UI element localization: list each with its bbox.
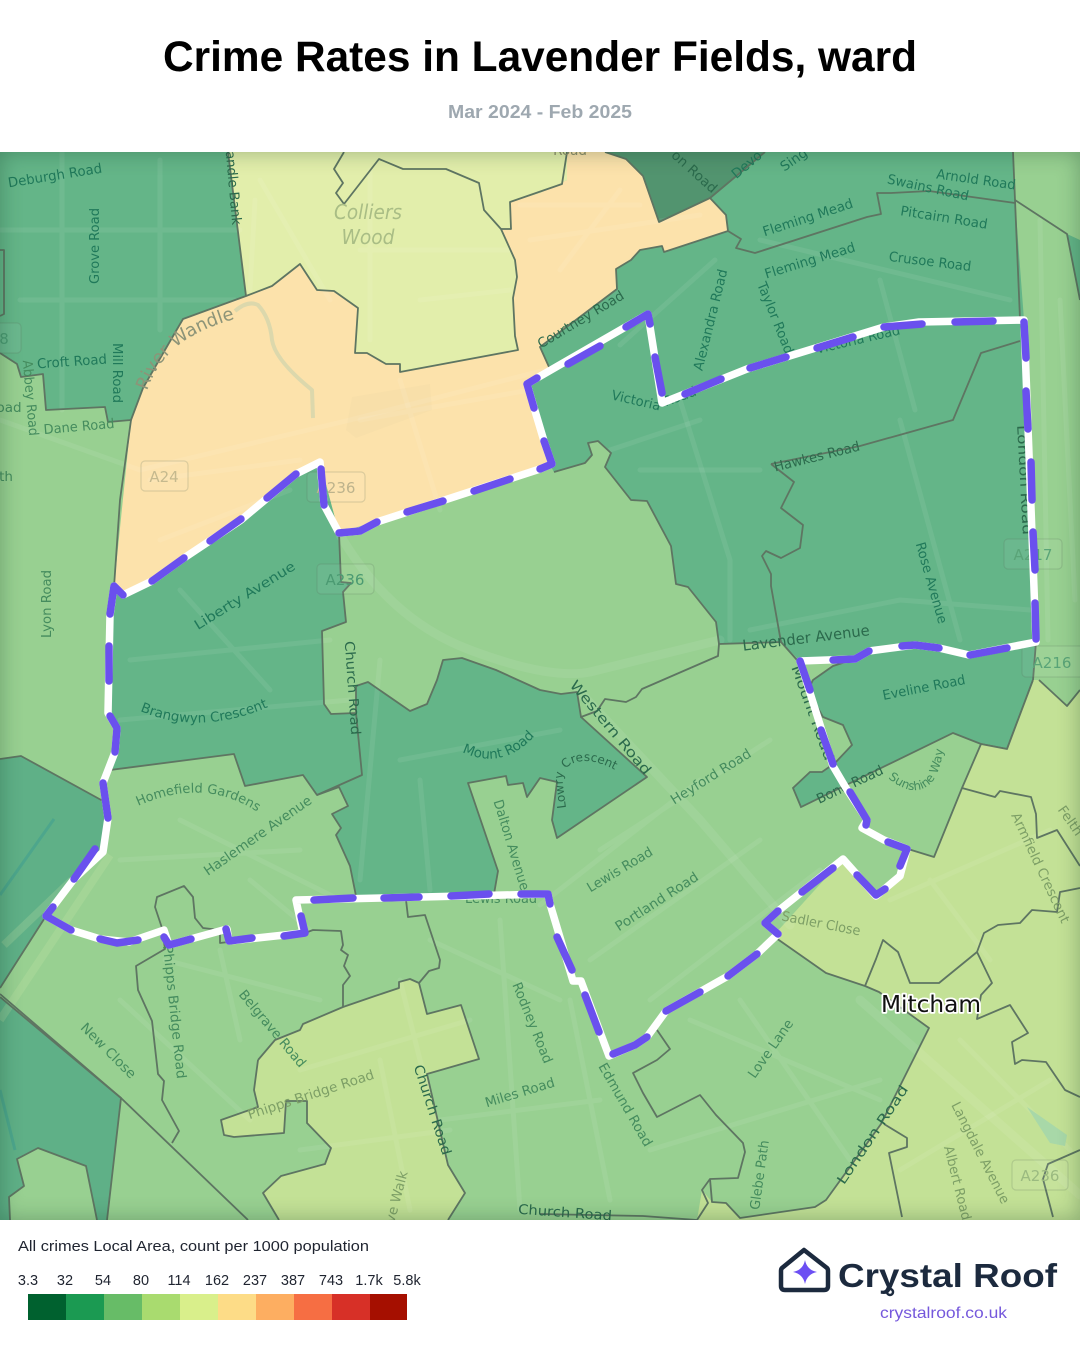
street name labels: Glebe Path	[747, 1139, 773, 1211]
street name labels: Hawkes Road	[772, 439, 862, 475]
street name labels: Road	[661, 384, 699, 410]
region: western dark green	[0, 756, 107, 988]
legend scale values	[18, 1273, 421, 1289]
region: south-western dark green	[0, 997, 121, 1220]
legend scale values: 237	[243, 1273, 267, 1289]
road number box: A24	[141, 461, 188, 491]
street name labels: andle Bank	[222, 150, 244, 226]
curved labels: river and crescents: Homefield Gardens	[136, 782, 260, 811]
region: Liberty Avenue dark green	[108, 462, 362, 795]
street name labels: Albert Road	[940, 1144, 974, 1222]
street name labels: Mill Road	[109, 343, 125, 403]
street name labels: Haslemere Avenue	[201, 793, 315, 879]
legend scale values: 5.8k	[393, 1273, 421, 1289]
curved labels: river and crescents	[136, 310, 945, 811]
road number box: A236 centre: A236	[326, 571, 364, 589]
legend scale values: 54	[95, 1273, 111, 1289]
legend title: All crimes Local Area, count per 1000 population	[18, 1239, 369, 1255]
water: river band south-west	[0, 855, 110, 1020]
place label: Colliers Wood: Colliers	[334, 200, 402, 224]
street name labels: Deburgh Road	[7, 161, 103, 191]
icon: house with star	[781, 1250, 828, 1290]
region: central orange high-crime area	[114, 152, 728, 596]
street name labels: Fleming Mead	[763, 240, 857, 282]
street name labels: Church Road	[518, 1202, 612, 1224]
legend scale values: 1.7k	[355, 1273, 383, 1289]
street name labels: Crusoe Road	[888, 249, 972, 275]
street name labels: Liberty Avenue	[192, 558, 298, 634]
curved labels: river and crescents: Brangwyn Crescent	[141, 699, 268, 726]
street name labels: Love Lane	[745, 1017, 797, 1081]
street name labels: Church Road	[341, 641, 363, 735]
street name labels: Armfield Crescent	[1007, 810, 1073, 926]
region: orange area building blocks	[346, 384, 432, 438]
street name labels: Sing	[777, 145, 811, 175]
street name labels: Lewis Road	[584, 844, 656, 896]
street name labels: Taylor Road	[753, 279, 797, 356]
street name labels: ve Walk	[382, 1169, 412, 1225]
road number box: A236 north	[307, 472, 365, 502]
region: Eveline Road dark green	[793, 642, 1036, 807]
street name labels: Rodney Road	[508, 980, 556, 1066]
street name labels: Belgrave Road	[235, 987, 309, 1071]
street name labels: Langdale Avenue	[947, 1099, 1013, 1207]
street name labels: Fleming Mead	[761, 196, 855, 240]
road number box: clipped left	[0, 323, 21, 353]
water: teal stream	[0, 819, 54, 1150]
street name labels: Arnold Road	[935, 167, 1017, 193]
road number box: A24: A24	[149, 468, 179, 486]
region: Colliers Wood pale yellow	[228, 152, 567, 372]
street name labels: Edmund Road	[595, 1060, 655, 1150]
region: Phipps Bridge yellow-green	[221, 979, 479, 1220]
street name labels: Heyford Road	[668, 746, 754, 808]
street name labels: Croft Road	[37, 352, 107, 372]
street name labels: Road	[553, 143, 587, 159]
street name labels: Mount Road	[787, 663, 837, 763]
road number box: A236 south-east	[1012, 1160, 1068, 1190]
street name labels: London Road	[1013, 425, 1035, 535]
street name labels: Dalton Avenue	[490, 798, 532, 892]
street name labels: Pitcairn Road	[899, 203, 989, 233]
street name labels: Victoria	[610, 388, 662, 414]
water: River Wandle in orange area	[235, 303, 313, 418]
road number box: A216: A216	[1033, 654, 1071, 672]
legend scale values: 80	[133, 1273, 149, 1289]
street name labels: Western Road	[566, 678, 654, 778]
map base: light green area	[0, 152, 1080, 1220]
street name labels: Lyon Road	[39, 570, 55, 638]
street name labels: Miles Road	[483, 1075, 557, 1111]
date range subtitle: Mar 2024 - Feb 2025	[448, 102, 632, 122]
road number box: A217	[1004, 539, 1062, 569]
ward outline: Lavender Fields white and purple dashed boundary	[46, 314, 1036, 1056]
ward and lsoa boundary lines	[0, 152, 1080, 1220]
street name labels: on Road	[668, 147, 720, 197]
legend scale values: 114	[167, 1273, 191, 1289]
street name labels: Phipps Bridge Road	[246, 1067, 376, 1123]
legend	[18, 1239, 421, 1320]
legend scale values: 162	[205, 1273, 229, 1289]
street name labels: Dane Road	[43, 416, 115, 438]
street name labels: Devo	[728, 148, 766, 182]
street name labels: Phipps Bridge Road	[159, 945, 189, 1079]
street name labels: Portland Road	[612, 869, 702, 935]
title: Crime Rates in Lavender Fields, ward	[163, 33, 917, 81]
region: far-right dark sliver	[1068, 234, 1080, 295]
street name labels: New Close	[77, 1020, 139, 1082]
road number box: A217: A217	[1014, 546, 1052, 564]
road number box: A236 north: A236	[317, 479, 355, 497]
street name labels: Bond Road	[814, 763, 886, 807]
legend scale values: 387	[281, 1273, 305, 1289]
street name labels: Swains Road	[886, 172, 970, 204]
street name labels: Lavender Avenue	[741, 621, 871, 655]
legend colour swatches	[28, 1294, 407, 1320]
curved labels: river and crescents: Sunshine Way	[889, 748, 945, 790]
road number box: A236 centre	[317, 564, 374, 594]
place label: Colliers Wood	[334, 204, 402, 244]
region: north-east dark green	[527, 152, 1037, 661]
road number box: A216	[1022, 646, 1080, 677]
place label: Mitcham: Mitcham	[881, 992, 981, 1018]
logo: Crystal Roof	[781, 1250, 1058, 1322]
legend scale values: 3.3	[18, 1273, 38, 1289]
street name labels: Church Road	[410, 1063, 454, 1157]
curved labels: river and crescents: River Wandle	[136, 310, 234, 390]
curved labels: river and crescents: Mount Road	[463, 730, 534, 759]
legend scale values: 743	[319, 1273, 343, 1289]
region: top darkest green	[605, 152, 765, 222]
region: Mount Road dark green	[317, 658, 647, 896]
legend scale values: 32	[57, 1273, 73, 1289]
logo wordmark: Crystal Roof	[838, 1257, 1058, 1294]
street name labels: Courtney Road	[535, 288, 627, 352]
region: yellow-green south-east	[697, 680, 1080, 1220]
curved labels: river and crescents: Lowry Crescent	[556, 754, 618, 808]
region: north-west dark green	[0, 152, 246, 422]
street name labels: Sadler Close	[780, 909, 862, 939]
street name labels: Abbey Road	[19, 359, 41, 437]
street name labels: Eveline Road	[881, 672, 967, 704]
website url: crystalroof.co.uk	[880, 1305, 1008, 1322]
street name labels: Rose Avenue	[912, 540, 950, 626]
street name labels: Alexandra Road	[691, 268, 731, 372]
street name labels: Victoria Road	[814, 323, 902, 357]
street name labels: London Road	[834, 1082, 912, 1188]
water: pond near Langdale Avenue	[1027, 1107, 1067, 1146]
faint roads and paths	[0, 152, 1031, 1120]
place label: Colliers Wood: Wood	[342, 225, 395, 249]
street name labels: Lewis Road	[465, 891, 537, 907]
road number box: A236 south-east: A236	[1021, 1167, 1059, 1185]
street name labels: Grove Road	[87, 208, 103, 284]
